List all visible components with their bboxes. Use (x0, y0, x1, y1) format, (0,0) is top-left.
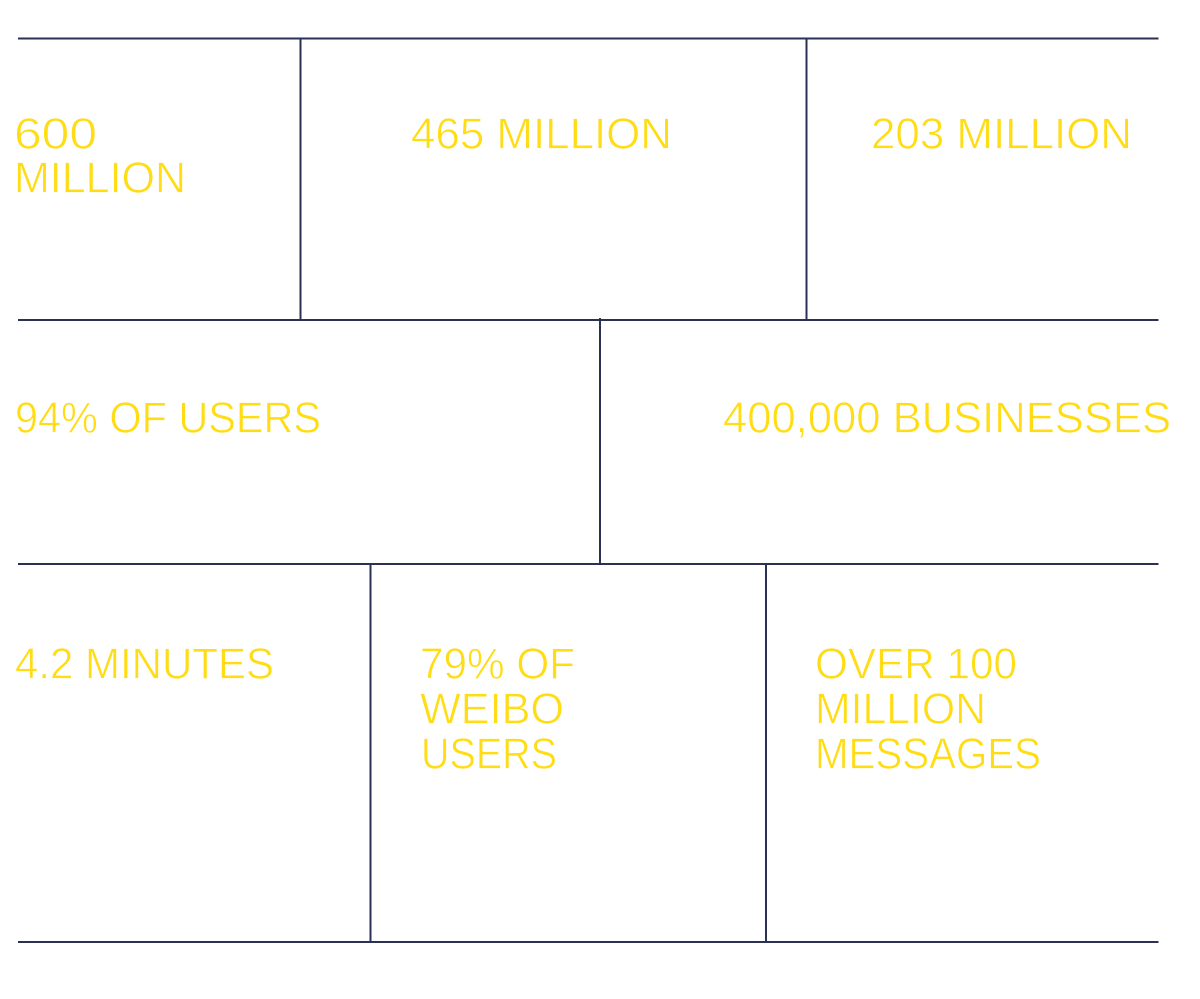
stat: 4.2 minutes: 4.2 MINUTES (15, 640, 274, 688)
stat: 94% of users: 94% OF USERS (15, 394, 321, 442)
stat: 600 million: MILLION (14, 154, 186, 202)
stat: 600 million (14, 110, 186, 202)
stat: 79% of Weibo users (420, 640, 575, 778)
stat: 400,000 businesses: 400,000 BUSINESSES (723, 394, 1171, 442)
stat: over 100 million messages: OVER 100 (815, 640, 1017, 688)
stat: 465 million: 465 MILLION (411, 110, 672, 158)
stat: over 100 million messages (815, 640, 1041, 778)
stat: 79% of Weibo users: WEIBO (420, 684, 564, 734)
stat: 203 million: 203 MILLION (871, 110, 1132, 158)
stat: 79% of Weibo users: 79% OF (420, 640, 575, 688)
stat: over 100 million messages: MESSAGES (815, 730, 1041, 778)
stat: 79% of Weibo users: USERS (421, 730, 557, 778)
stat: 600 million: 600 (14, 110, 97, 158)
stat: over 100 million messages: MILLION (815, 684, 986, 734)
